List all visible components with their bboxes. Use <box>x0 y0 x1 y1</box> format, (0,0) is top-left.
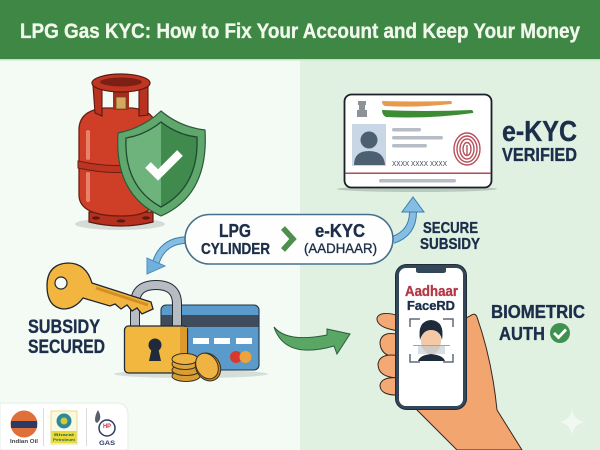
phone text: Aadhaar FaceRD <box>405 284 458 313</box>
arrow: blue curve to Aadhaar card <box>393 197 424 240</box>
icon: gold coins <box>172 348 226 386</box>
phone text: Aadhaar FaceRD: FaceRD <box>407 298 455 313</box>
label: biometric auth <box>491 302 585 344</box>
label: subsidy secured <box>28 317 105 358</box>
arrow: blue curve to key <box>147 240 186 274</box>
logo: HP Gas: GAS <box>99 440 116 447</box>
icon: gold key <box>47 263 153 314</box>
icon: green check badge <box>550 323 570 343</box>
label: secure subsidy: SECURE <box>423 220 478 237</box>
label: biometric auth: BIOMETRIC <box>491 302 585 322</box>
header banner <box>0 0 600 60</box>
pill text: LPG cylinder: LPG <box>219 221 251 241</box>
detail lines <box>379 128 456 182</box>
label: subsidy secured: SUBSIDY <box>28 317 100 338</box>
label: secure subsidy <box>420 220 480 253</box>
pill text: LPG cylinder <box>201 221 270 258</box>
ID number: XXXX XXXX XXXX <box>392 159 447 168</box>
icon: padlock <box>124 285 188 373</box>
phone text: Aadhaar FaceRD: Aadhaar <box>405 284 458 300</box>
logo: HP Gas <box>95 410 116 447</box>
label: e-KYC verified: e-KYC <box>502 116 577 148</box>
pill text: e-KYC Aadhaar: (AADHAAR) <box>304 240 377 256</box>
pill text: e-KYC Aadhaar <box>304 221 377 256</box>
panel: oil company logos <box>0 403 128 450</box>
logo: Bharat Petroleum <box>51 411 77 444</box>
icon: fingerprint <box>454 133 480 165</box>
label: e-KYC verified <box>502 116 577 165</box>
arrow: green curve to phone <box>274 327 350 354</box>
logo: Bharat Petroleum: Petroleum <box>53 437 75 442</box>
label: secure subsidy: SUBSIDY <box>420 236 480 253</box>
icon: green shield with check <box>118 111 205 216</box>
icon: hand holding phone <box>377 264 522 450</box>
pill: LPG cylinder to e-KYC flow <box>185 214 393 264</box>
icon: face scan <box>410 319 453 362</box>
tricolor stripes <box>382 101 473 118</box>
logo: HP Gas: HP <box>103 424 111 430</box>
label: e-KYC verified: VERIFIED <box>502 145 577 165</box>
label: subsidy secured: SECURED <box>28 337 105 358</box>
pill text: e-KYC Aadhaar: e-KYC <box>315 221 365 241</box>
pill text: LPG cylinder: CYLINDER <box>201 241 270 258</box>
logo: Bharat Petroleum: Bharat <box>54 432 75 437</box>
icon: red LPG cylinder <box>75 74 165 230</box>
emblem <box>357 101 367 117</box>
icon: credit card <box>114 305 268 378</box>
label: biometric auth: AUTH <box>499 324 545 344</box>
logo: Indian Oil: Indian Oil <box>10 439 39 445</box>
fingers <box>377 313 400 395</box>
phone <box>396 264 466 410</box>
hand and arm <box>415 314 522 450</box>
photo placeholder <box>352 124 386 166</box>
icon: green chevron <box>283 228 293 250</box>
icon: Aadhaar card <box>337 94 497 192</box>
icon: sparkle watermark <box>560 409 584 435</box>
